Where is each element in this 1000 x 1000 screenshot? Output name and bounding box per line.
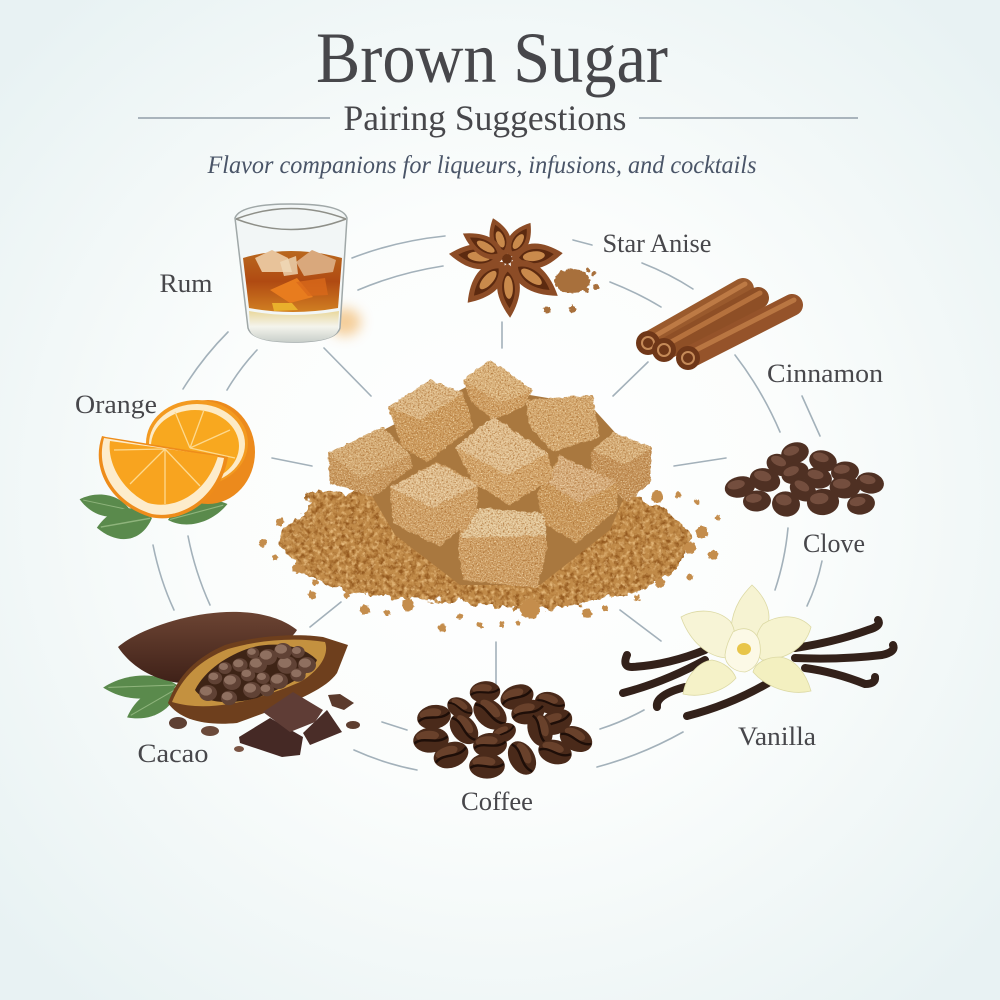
chocolate: [239, 692, 342, 757]
cinnamon stick middle: [664, 298, 758, 350]
cinnamon stick back: [648, 289, 743, 343]
central brown sugar pile: [259, 360, 720, 632]
star anise item: [448, 215, 599, 318]
spice powder: [544, 268, 599, 314]
rum item: [235, 204, 361, 342]
label: Cinnamon: Cinnamon: [767, 359, 883, 388]
star anise pods: [448, 215, 565, 318]
title: Brown Sugar: [316, 18, 668, 98]
orange front wedge: [99, 436, 228, 518]
glass base: [249, 311, 339, 342]
cacao item: [103, 612, 360, 757]
label: Vanilla: Vanilla: [738, 722, 816, 751]
vanilla flower: [681, 585, 811, 695]
orange back half: [146, 400, 255, 504]
orange item: [77, 400, 255, 544]
cacao pod cavity: [195, 645, 317, 702]
subtitle with rules: Pairing Suggestions: [344, 98, 626, 138]
cacao nibs: [169, 694, 360, 752]
cinnamon stick front: [688, 305, 792, 358]
tagline: Flavor companions for liqueurs, infusions, and cocktails: [207, 152, 756, 179]
connector lines: [153, 236, 822, 770]
loose sugar crumbs: [259, 470, 720, 632]
cacao beans: [199, 643, 316, 705]
sugar cubes: [328, 360, 652, 588]
coffee item: [412, 680, 596, 780]
clove item: [723, 439, 886, 519]
label: Cacao: Cacao: [138, 739, 208, 768]
whole cacao pod: [118, 612, 297, 683]
label: Coffee: Coffee: [461, 787, 533, 816]
glass body: [235, 204, 347, 342]
sugar cube shadow: [345, 385, 640, 585]
label: Clove: Clove: [803, 529, 865, 558]
rum glow: [329, 308, 361, 336]
label: Star Anise: Star Anise: [602, 229, 712, 258]
cinnamon item: [636, 284, 794, 370]
vanilla item: [623, 585, 894, 716]
ice cubes and reflections: [255, 250, 336, 311]
orange leaves: [77, 490, 230, 544]
vanilla pods: [623, 620, 894, 716]
open cacao pod: [168, 635, 348, 724]
cacao leaves: [103, 674, 184, 728]
label: Orange: Orange: [75, 390, 157, 419]
label: Rum: Rum: [160, 269, 212, 298]
rum liquid: [243, 251, 342, 312]
